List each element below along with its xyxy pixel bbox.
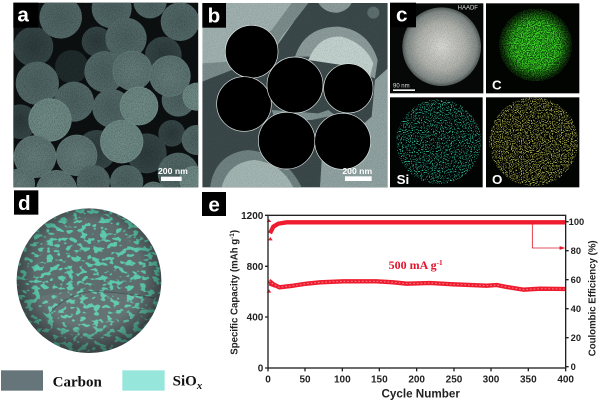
specific capacity series (269, 281, 566, 290)
annotation: current density: 500 mA g (389, 258, 437, 272)
left axis numbers: 400 (247, 313, 264, 324)
right axis numbers: 60 (571, 275, 581, 285)
x axis numbers: 250 (446, 375, 463, 386)
x axis numbers (265, 375, 574, 386)
label e: e (208, 194, 220, 217)
left axis numbers: 0 (258, 364, 264, 375)
scale bar b: 200 nm (342, 166, 372, 176)
left axis numbers (241, 211, 264, 375)
HAADF image: 90 nm (393, 84, 410, 90)
legend: carbon (1, 370, 102, 391)
panel e: cycling performance chart (202, 192, 599, 401)
scale bar a (158, 166, 188, 181)
left axis title: Specific Capacity (mAh g (229, 239, 240, 355)
sphere with carbon and SiOx domains (17, 208, 161, 353)
HAADF image: HAADF (458, 5, 478, 11)
legend: SiOx: SiO (173, 374, 197, 390)
x axis numbers: 400 (557, 375, 574, 386)
x axis numbers: 150 (371, 375, 388, 386)
silicon map (390, 97, 483, 187)
oxygen map: O (492, 172, 502, 187)
label b: b (208, 5, 220, 28)
x axis numbers: 50 (299, 375, 311, 386)
arrow to right axis (532, 223, 564, 249)
left axis numbers: 800 (247, 262, 264, 273)
right axis numbers: 0 (571, 362, 576, 372)
left axis numbers: 1200 (241, 211, 264, 222)
carbon map: C (492, 77, 502, 92)
HAADF image: c (396, 4, 407, 27)
annotation: current density: -1 (437, 258, 443, 267)
right axis numbers: 100 (569, 217, 584, 227)
x axis numbers: 350 (520, 375, 537, 386)
oxygen map (486, 97, 579, 187)
silicon map: Si (397, 172, 409, 187)
x axis numbers: 0 (265, 375, 271, 386)
right axis numbers: 80 (571, 246, 581, 256)
label d: d (18, 192, 31, 215)
scale bar a: 200 nm (158, 166, 188, 176)
left axis title: -1 (229, 233, 236, 239)
x axis numbers: 300 (483, 375, 500, 386)
label b (202, 3, 226, 28)
x axis title: Cycle Number (381, 388, 460, 401)
panel c: HAADF and elemental maps (390, 3, 579, 187)
panel a: SEM image of carbon spheres (13, 2, 198, 188)
right axis title: Coulombic Efficiency (%) (588, 240, 599, 356)
left axis title: ) (229, 230, 240, 233)
coulombic efficiency series (267, 219, 566, 293)
carbon map (486, 3, 579, 93)
panel d: sphere schematic (1, 190, 203, 392)
panel b: TEM image of spheres (202, 3, 388, 187)
label a: a (17, 4, 29, 27)
x axis numbers: 200 (408, 375, 425, 386)
legend: SiOx (122, 370, 203, 392)
right axis numbers: 40 (571, 304, 581, 314)
label e (202, 192, 226, 217)
right axis numbers (569, 217, 584, 372)
right axis numbers: 20 (571, 333, 581, 343)
scale bar b (342, 166, 372, 181)
axes frame and ticks (265, 215, 569, 371)
legend: carbon: Carbon (53, 374, 102, 390)
label d (14, 190, 38, 215)
label a (13, 3, 38, 28)
legend: SiOx: x (196, 381, 203, 392)
HAADF image (390, 3, 483, 93)
x axis numbers: 100 (334, 375, 351, 386)
